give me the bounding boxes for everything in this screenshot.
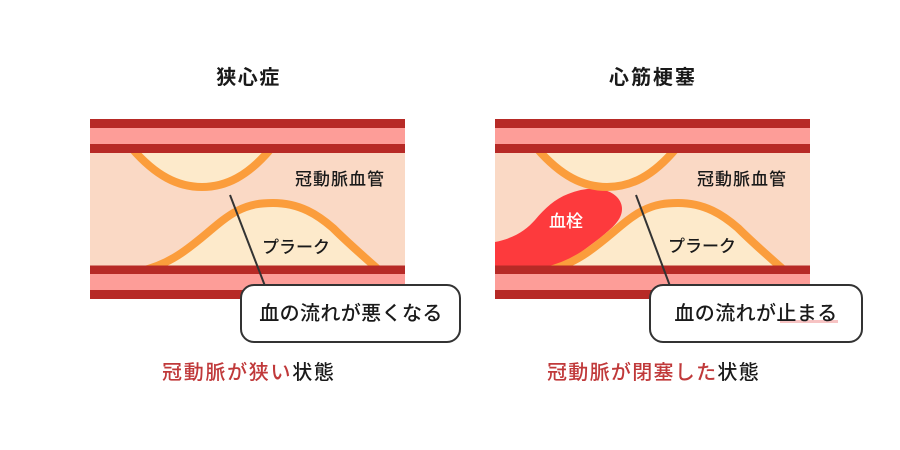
caption: occluded artery: 冠動脈が閉塞した状態 <box>547 361 760 384</box>
pointer line <box>636 195 670 286</box>
vessel: angina <box>90 128 405 290</box>
upper plaque <box>537 148 676 187</box>
vessel walls <box>495 119 810 299</box>
label: plaque: プラーク <box>668 237 736 256</box>
lower plaque <box>140 203 380 271</box>
vessel: infarction <box>495 128 810 290</box>
label: thrombus: 血栓 <box>549 212 583 231</box>
label: coronary artery: 冠動脈血管 <box>697 170 787 189</box>
panel: myocardial infarction <box>495 66 862 384</box>
callout: blood flow stops: 血の流れが止まる <box>674 302 838 325</box>
thrombus <box>495 189 622 268</box>
callout: poor blood flow: 血の流れが悪くなる <box>259 302 443 325</box>
callout: blood flow stops <box>650 285 862 342</box>
vessel walls <box>90 119 405 299</box>
panel: angina <box>90 66 460 384</box>
bottom wall cover <box>495 274 810 290</box>
lower plaque <box>545 203 785 271</box>
label: plaque: プラーク <box>262 238 330 257</box>
title: angina: 狭心症 <box>216 66 281 89</box>
bottom wall cover <box>90 274 405 290</box>
label: coronary artery: 冠動脈血管 <box>295 170 385 189</box>
title: infarction: 心筋梗塞 <box>609 66 697 89</box>
upper plaque <box>132 148 271 187</box>
callout: poor blood flow <box>241 285 460 342</box>
caption: narrowed artery: 冠動脈が狭い状態 <box>162 361 336 384</box>
pointer line <box>230 195 265 286</box>
